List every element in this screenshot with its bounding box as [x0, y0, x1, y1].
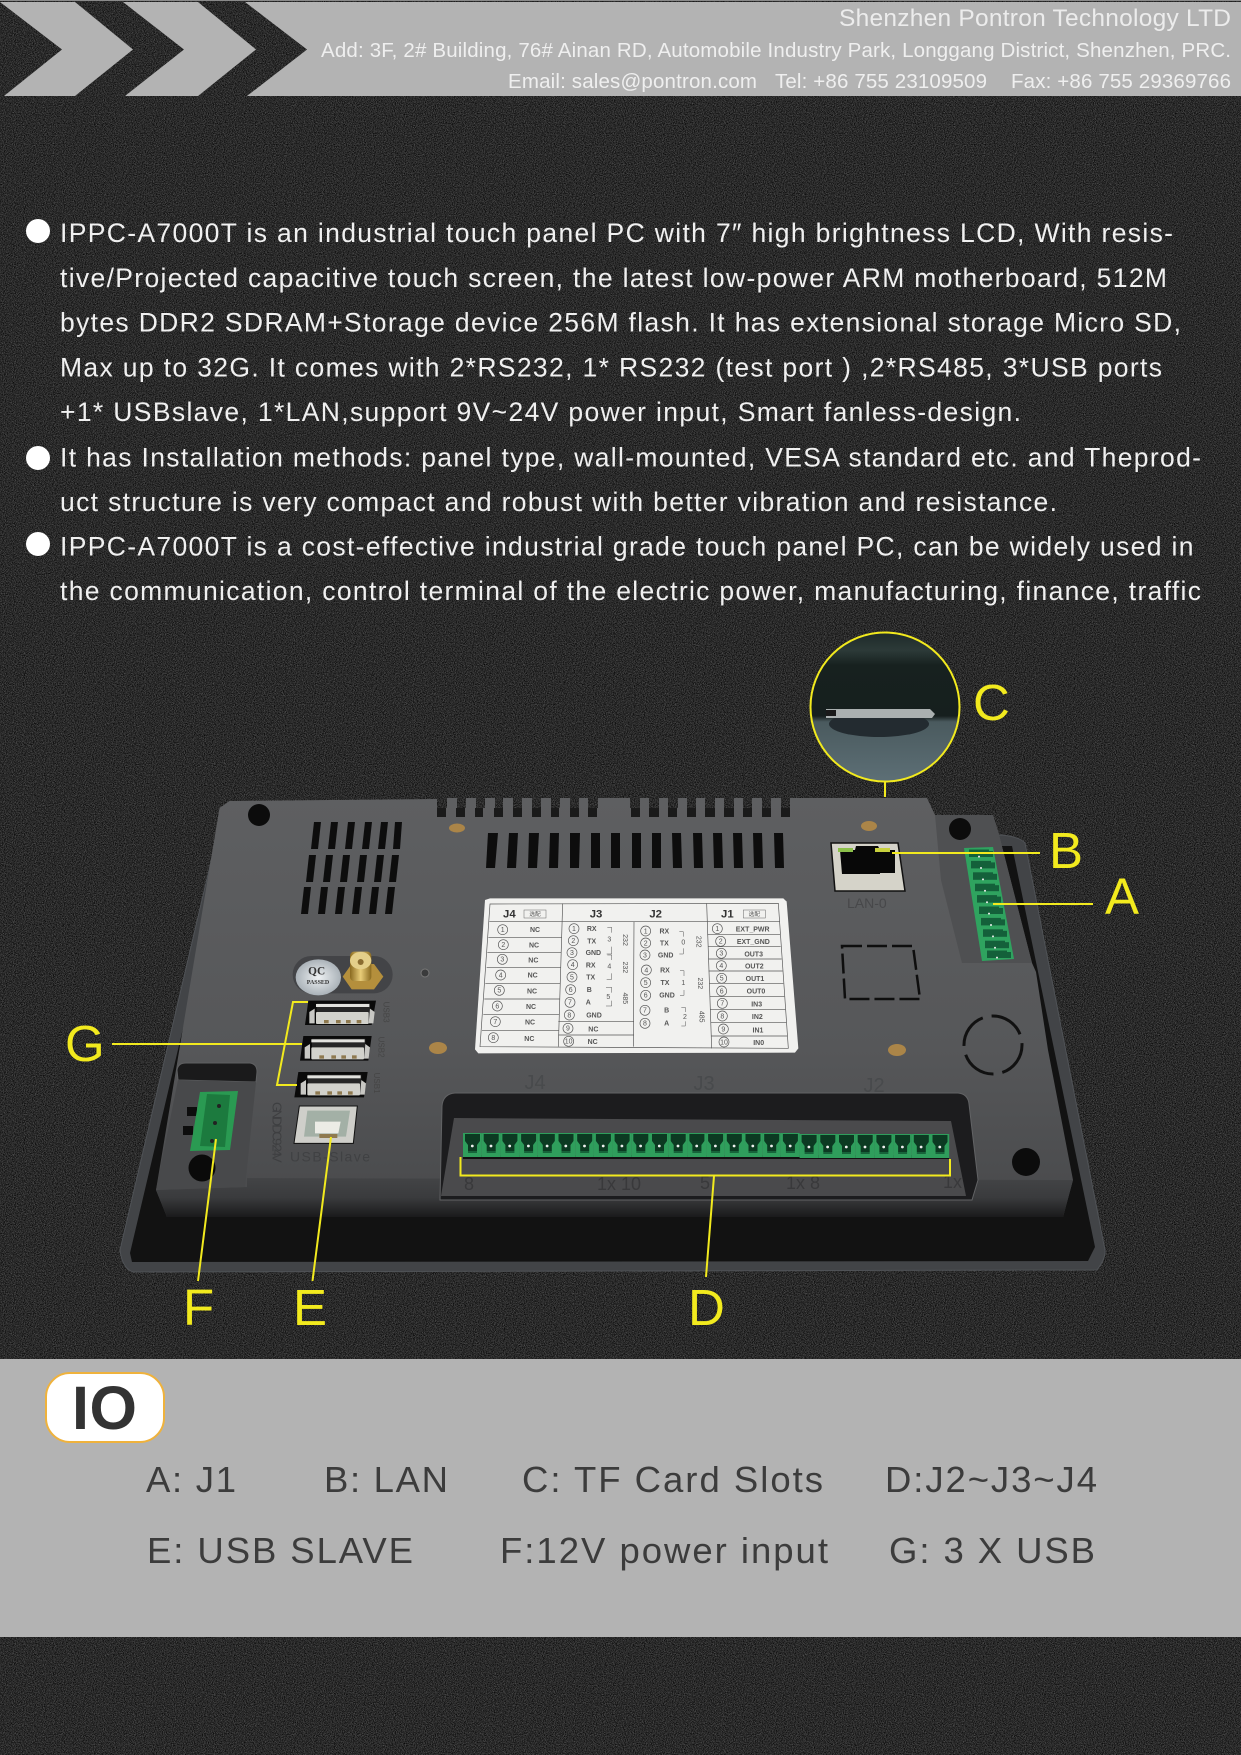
main housing	[156, 798, 1073, 1217]
table headings: J3	[590, 908, 602, 920]
J3 column: 232	[621, 962, 628, 973]
description text block: +1* USBslave, 1*LAN,support 9V~24V power input, Smart fanless-design.	[60, 397, 1021, 427]
description text block: the communication, control terminal of the electric power, manufacturing, finance, traffic	[60, 576, 1201, 606]
J1 column: IN0	[753, 1040, 764, 1047]
pin label sticker: 1	[501, 927, 505, 934]
J1 column: OUT3	[744, 951, 763, 958]
contact line	[508, 70, 1231, 93]
J3 column: RX	[587, 926, 597, 933]
table headings: 选配	[529, 910, 541, 918]
description text block: IPPC-A7000T is a cost-effective industrial grade touch panel PC, can be widely used in	[60, 532, 1194, 562]
J1 column: OUT1	[746, 976, 764, 983]
J1 column: IN2	[752, 1014, 763, 1021]
J3 column: A	[586, 1000, 591, 1007]
J1 column: OUT0	[747, 989, 765, 996]
SMA antenna connector	[343, 952, 383, 989]
silk labels J4 J3 J2	[524, 1072, 885, 1097]
pin label sticker: 1	[644, 928, 648, 935]
J4 column: NC	[525, 1020, 535, 1027]
dashed hatch	[842, 946, 920, 999]
pin label sticker: 6	[720, 988, 724, 995]
table headings	[503, 908, 765, 920]
J3 column: GND	[586, 950, 601, 957]
USB slave port: USB-Slave	[290, 1148, 370, 1164]
callout E	[293, 1137, 331, 1336]
callout B: B	[1049, 822, 1083, 879]
J2 column	[658, 928, 705, 1028]
table headings: 选配	[749, 910, 760, 918]
legend row 2: F:12V power input	[500, 1530, 828, 1571]
pin label sticker: 1	[715, 926, 719, 933]
pin label sticker: 1	[572, 926, 576, 933]
pin label sticker: 7	[720, 1001, 724, 1008]
J2 column: 0	[681, 940, 685, 947]
pin label sticker: 3	[500, 957, 504, 964]
J3 column: 5	[606, 994, 610, 1001]
description text block	[26, 218, 1201, 606]
callout G	[65, 1002, 308, 1085]
pin label sticker: 2	[501, 942, 505, 949]
TF card slot detail	[826, 709, 935, 737]
J4 column: NC	[528, 973, 538, 980]
J2 column: GND	[658, 953, 673, 960]
J3 column: 232	[621, 934, 628, 946]
USB ports: USB3	[381, 1002, 390, 1023]
QC sticker and antenna recess	[293, 952, 393, 995]
QC sticker	[296, 959, 341, 995]
callout E: E	[293, 1279, 327, 1336]
mounting holes	[248, 804, 1040, 1176]
callout D	[460, 1157, 950, 1336]
J1 column: OUT2	[745, 964, 764, 971]
J2 column: RX	[660, 967, 670, 974]
silk numbers: 1x 10	[597, 1174, 641, 1194]
power green terminal	[190, 1091, 238, 1151]
J1 column: EXT_PWR	[736, 927, 770, 934]
legend row 1: A: J1	[146, 1459, 236, 1500]
pin label sticker: 2	[571, 938, 575, 945]
pin label sticker: 9	[721, 1026, 725, 1033]
silk numbers: 1x 8	[786, 1173, 820, 1193]
LAN port: LAN-0	[847, 895, 887, 911]
pin label sticker: 4	[499, 972, 503, 979]
bezel frame	[120, 835, 1105, 1272]
J4 column: NC	[529, 942, 539, 949]
pin label sticker: 3	[570, 950, 574, 957]
bullet 1	[26, 219, 50, 243]
pin label sticker: 7	[568, 1000, 572, 1007]
legend row 1: D:J2~J3~J4	[885, 1459, 1097, 1500]
power connector recess	[156, 1063, 257, 1190]
pin label sticker: 10	[720, 1039, 728, 1046]
device rear view	[120, 798, 1105, 1272]
J3 column: NC	[588, 1026, 598, 1033]
pin label sticker: 8	[567, 1012, 571, 1019]
callout A: A	[1105, 868, 1139, 925]
pin label sticker: 8	[643, 1021, 647, 1028]
contact line: Fax: +86 755 29369766	[1011, 70, 1231, 93]
lower bevel	[156, 1178, 1073, 1217]
pin label sticker: 5	[497, 988, 501, 995]
circled numbers	[488, 924, 729, 1047]
J2 column: RX	[659, 928, 670, 935]
J3 column: RX	[586, 962, 596, 969]
table headings: J1	[721, 908, 734, 920]
callout F	[183, 1139, 216, 1336]
J4 column: NC	[527, 988, 537, 995]
J2 column: 232	[694, 936, 701, 948]
bullet 3	[26, 532, 50, 556]
left vents	[301, 822, 402, 914]
description text block: It has Installation methods: panel type, wall-mounted, VESA standard etc. and Theprod-	[60, 442, 1201, 472]
pin label sticker: 8	[491, 1035, 495, 1042]
J3 column: TX	[587, 938, 596, 945]
top vents	[486, 833, 784, 868]
J2 J3 J4 green terminals	[463, 1133, 949, 1159]
contact line: Tel: +86 755 23109509	[775, 70, 987, 93]
LAN port	[831, 843, 905, 911]
pin label sticker: 4	[719, 963, 723, 970]
J4 column	[524, 927, 540, 1043]
USB slave port	[270, 1102, 370, 1164]
power recess hole	[188, 1154, 216, 1182]
J1 column: IN1	[753, 1027, 764, 1034]
pin label sticker: 4	[644, 967, 648, 974]
J3 column: GND	[586, 1013, 602, 1020]
screws	[429, 821, 906, 1056]
legend row 2	[147, 1530, 1095, 1571]
pin label sticker: 5	[720, 976, 724, 983]
USB ports	[294, 1001, 390, 1097]
J2 column: 2	[683, 1014, 687, 1021]
J4 column: NC	[528, 957, 538, 964]
silk numbers	[464, 1172, 962, 1194]
silk numbers: 1x	[943, 1172, 962, 1192]
legend row 1: C: TF Card Slots	[522, 1459, 823, 1500]
silk numbers: 5	[700, 1173, 710, 1193]
J3 column: 485	[621, 993, 628, 1004]
status LED hole	[421, 969, 429, 977]
pin label sticker	[475, 898, 798, 1053]
top fin pockets	[437, 808, 790, 817]
J4 column: NC	[526, 1004, 536, 1011]
J2 column: 485	[698, 1011, 705, 1023]
J1 green terminal	[964, 847, 1014, 961]
USB slave port: GND DC9-24V	[270, 1102, 285, 1163]
IO legend panel	[0, 1359, 1241, 1637]
header band	[0, 0, 1241, 96]
J2 column: 1	[681, 980, 685, 987]
pin label sticker: 6	[569, 987, 573, 994]
description text block: uct structure is very compact and robust with better vibration and resistance.	[60, 487, 1057, 517]
callout letter C: C	[973, 674, 1010, 731]
pin label sticker: 8	[720, 1013, 724, 1020]
silk numbers: 8	[464, 1174, 474, 1194]
J1 column: EXT_GND	[737, 939, 770, 946]
J3 column	[586, 926, 628, 1046]
pin label sticker: 6	[495, 1003, 499, 1010]
contact line: Email: sales@pontron.com	[508, 70, 757, 93]
description text block: bytes DDR2 SDRAM+Storage device 256M flash. It has extensional storage Micro SD,	[60, 308, 1181, 338]
J3 column: TX	[586, 974, 595, 981]
J2 column: 232	[696, 978, 703, 989]
address: Add: 3F, 2# Building, 76# Ainan RD, Automobile Industry Park, Longgang District, Shenzhen, PRC.	[321, 39, 1231, 62]
legend row 1: B: LAN	[324, 1459, 448, 1500]
USB ports: USB2	[376, 1037, 385, 1058]
company name: Shenzhen Pontron Technology LTD	[839, 5, 1231, 32]
silk labels J4 J3 J2: J3	[693, 1073, 715, 1095]
pin label sticker: 2	[644, 940, 648, 947]
chevrons	[0, 2, 1241, 96]
table headings: J4	[503, 908, 516, 920]
pin label sticker: 6	[644, 993, 648, 1000]
callout F: F	[183, 1279, 214, 1336]
J3 column: 4	[607, 963, 611, 970]
table headings: J2	[649, 908, 662, 920]
description text block: tive/Projected capacitive touch screen, the latest low-power ARM motherboard, 512M	[60, 263, 1167, 293]
bullet 2	[26, 446, 50, 470]
callout D: D	[688, 1279, 725, 1336]
pin label sticker: 5	[644, 980, 648, 987]
description text block: IPPC-A7000T is an industrial touch panel PC with 7″ high brightness LCD, With resis-	[60, 218, 1173, 248]
J2 column: TX	[660, 940, 669, 947]
pin label sticker: 5	[570, 974, 574, 981]
J2 column: A	[664, 1021, 669, 1028]
IO badge: IO	[72, 1374, 137, 1442]
description text block: Max up to 32G. It comes with 2*RS232, 1* RS232 (test port ) ,2*RS485, 3*USB ports	[60, 352, 1162, 382]
J2 column: B	[664, 1008, 669, 1015]
J3 column: NC	[588, 1039, 598, 1046]
J4 column: NC	[530, 927, 540, 934]
J2 column: TX	[661, 980, 670, 987]
IO badge	[46, 1373, 164, 1442]
J1 column: IN3	[751, 1001, 762, 1008]
terminal channel	[935, 815, 1032, 963]
J2 column: GND	[659, 993, 675, 1000]
QC sticker: QC	[308, 966, 325, 978]
callout G: G	[65, 1015, 105, 1072]
QC sticker: PASSED	[307, 980, 330, 986]
speaker grille	[964, 1016, 1022, 1074]
silk labels J4 J3 J2: J4	[524, 1072, 546, 1094]
legend row 1	[146, 1459, 1097, 1500]
pin label sticker: 4	[571, 962, 575, 969]
pin label sticker: 10	[565, 1039, 573, 1046]
pin label sticker: 3	[719, 951, 723, 958]
pin label sticker: 9	[566, 1026, 570, 1033]
J3 column: B	[587, 987, 592, 994]
J3 column: 3	[607, 937, 611, 944]
bottom connector recess	[440, 1072, 978, 1200]
legend row 2: G: 3 X USB	[889, 1530, 1095, 1571]
USB ports: USB1	[372, 1073, 381, 1094]
J4 column: NC	[524, 1036, 534, 1043]
bezel inner black	[130, 846, 1095, 1262]
silk labels J4 J3 J2: J2	[863, 1075, 885, 1097]
pin label sticker: 2	[719, 939, 723, 946]
pin label sticker: 7	[643, 1008, 647, 1015]
pin label sticker: 7	[493, 1019, 497, 1026]
J1 column	[736, 927, 770, 1047]
pin label sticker: 3	[643, 952, 647, 959]
legend row 2: E: USB SLAVE	[147, 1530, 413, 1571]
callout C zoom circle	[810, 632, 960, 797]
